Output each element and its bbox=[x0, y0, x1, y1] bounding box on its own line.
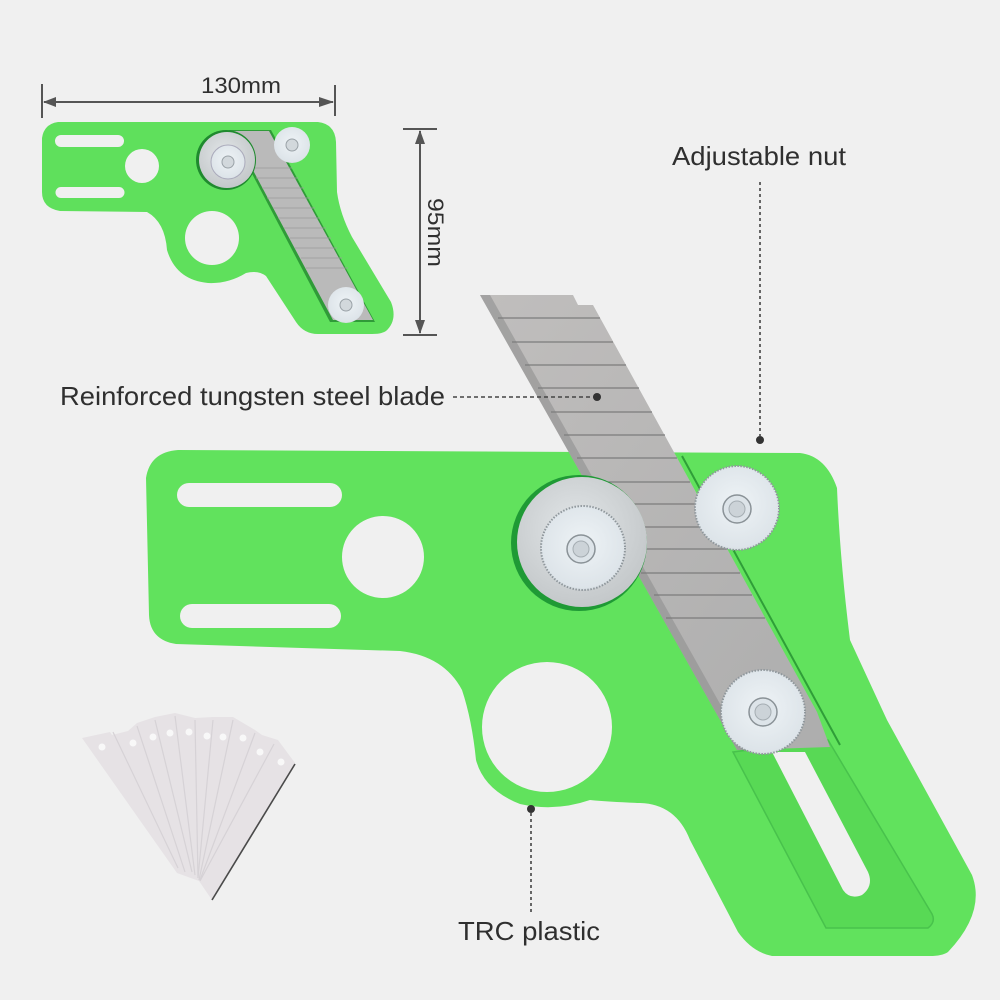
adjustable nut bottom bbox=[721, 670, 805, 754]
callout: plastic: TRC plastic bbox=[458, 916, 600, 946]
height label: 95mm bbox=[423, 198, 448, 267]
recessed blade track with slot bbox=[682, 456, 933, 928]
width dimension arrow bbox=[42, 84, 335, 118]
small product diagram with dimensions bbox=[42, 73, 448, 335]
callout: blade: Reinforced tungsten steel blade bbox=[60, 381, 445, 411]
callout: adjustable nut: Adjustable nut bbox=[672, 141, 847, 171]
large washer and nut bbox=[511, 475, 647, 611]
height dimension arrow bbox=[403, 129, 437, 335]
adjustable nut top bbox=[695, 466, 779, 550]
callout: plastic bbox=[458, 805, 600, 946]
small blade bbox=[229, 130, 375, 322]
small nuts bbox=[196, 127, 364, 323]
spare blades fan bbox=[82, 713, 295, 900]
width label: 130mm bbox=[201, 73, 281, 98]
callout: adjustable nut bbox=[672, 141, 847, 444]
main blade bbox=[480, 295, 830, 750]
callout: blade bbox=[60, 381, 601, 411]
main green cutter body bbox=[146, 450, 976, 956]
small green cutter body bbox=[42, 122, 394, 334]
